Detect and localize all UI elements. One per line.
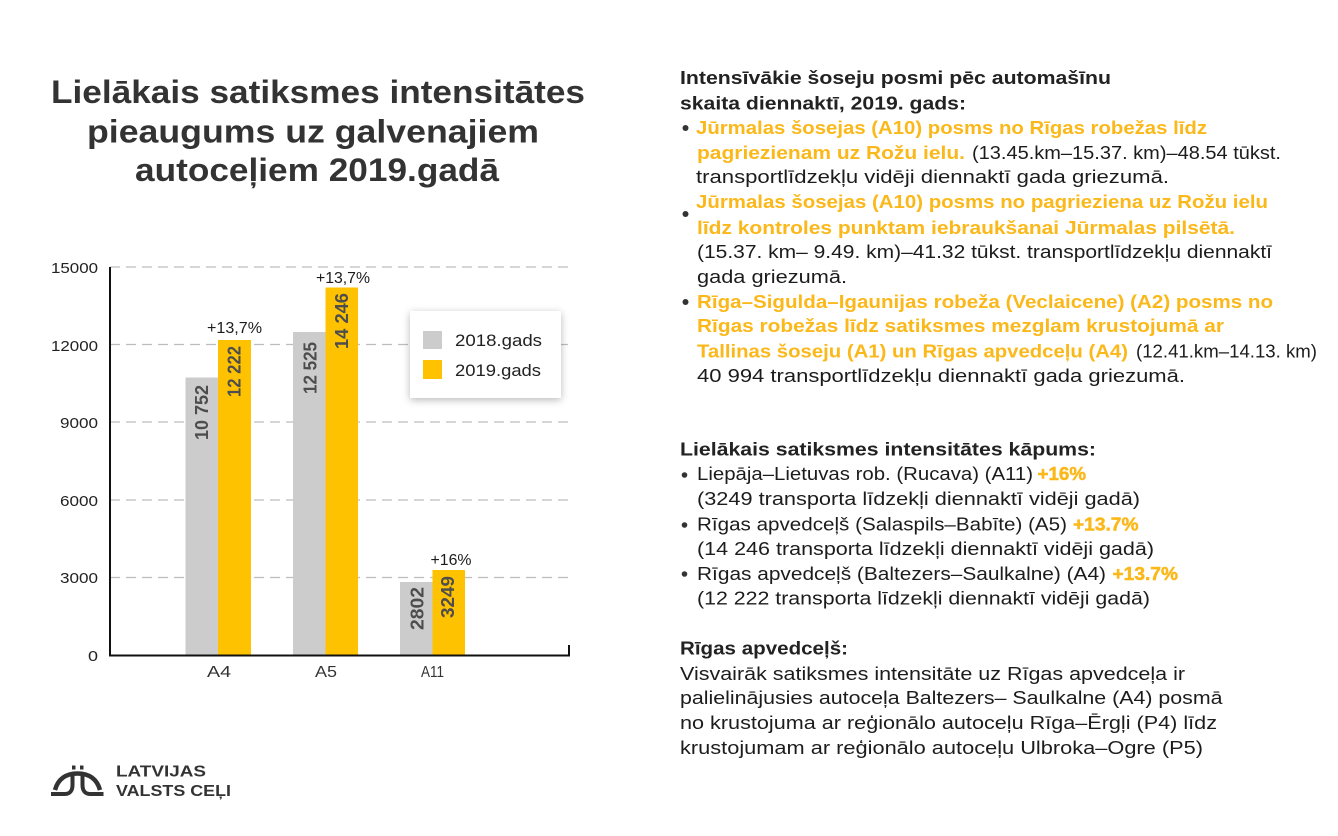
legend: 2018.gads [455,331,542,350]
list item A11: Liepāja–Lietuvas rob. (Rucava) (A11) [697,464,1033,484]
x axis labels [207,664,444,681]
list item 2: (15.37. km– 9.49. km)–41.32 tūkst. transportlīdzekļu diennaktī [697,242,1272,262]
panel: Riga ring road [680,638,1224,758]
list item 3: 40 994 transportlīdzekļu diennaktī gada griezumā. [697,366,1185,386]
bars A5 [293,270,370,655]
list item A11: +16% [1038,464,1086,484]
list item 3: Tallinas šoseju (A1) un Rīgas apvedceļu (A4) [697,342,1128,362]
legend [410,311,561,398]
text block: Visvairāk satiksmes intensitāte uz Rīgas apvedceļa ir [680,664,1185,684]
heading: Intensīvākie šoseju posmi pēc automašīnu [680,68,1111,88]
list item 3 [682,292,1317,386]
list item A4: +13.7% [1112,564,1178,584]
list item A5: Rīgas apvedceļš (Salaspils–Babīte) (A5) [697,514,1067,534]
list item 3: Rīgas robežas līdz satiksmes mezglam krustojumā ar [697,316,1224,336]
list item 1 [682,118,1281,187]
y axis labels [51,260,98,665]
title [51,74,585,188]
bar chart [51,260,569,681]
list item 2: gada griezumā. [697,267,847,287]
y axis labels: 9000 [60,415,98,432]
bars A11: +16% [430,552,472,569]
list item A5: +13.7% [1073,514,1138,534]
heading: Rīgas apvedceļš: [680,638,848,658]
list item A4: Rīgas apvedceļš (Baltezers–Saulkalne) (A4) [697,564,1106,584]
panel: busiest road sections [680,68,1317,386]
bars A5: 14 246 [332,293,352,349]
list item A11 [682,464,1140,509]
text block: palielinājusies autoceļa Baltezers– Saulkalne (A4) posmā [680,688,1224,708]
text block: no krustojuma ar reģionālo autoceļu Rīga–Ērgļi (P4) līdz [680,713,1217,733]
list item A5: (14 246 transporta līdzekļi diennaktī vidēji gadā) [697,539,1154,559]
panel: largest traffic increase [680,440,1178,608]
heading: Lielākais satiksmes intensitātes kāpums: [680,440,1096,460]
bars A5: 12 525 [300,342,320,394]
bars A5: +13,7% [316,270,370,287]
x axis labels: A5 [315,664,337,681]
bars A4: 12 222 [224,346,244,397]
list item A5 [682,514,1154,559]
title: autoceļiem 2019.gadā [135,152,499,188]
text block: krustojumam ar reģionālo autoceļu Ulbroka–Ogre (P5) [680,738,1203,758]
bars A11 [400,552,472,655]
bars A4: +13,7% [207,320,262,337]
y axis labels: 3000 [60,570,98,587]
logo: Latvijas Valsts Ceļi: VALSTS CEĻI [116,783,231,800]
list item 1: (13.45.km–15.37. km)–48.54 tūkst. [972,143,1281,163]
title: Lielākais satiksmes intensitātes [51,74,585,110]
list item 2: Jūrmalas šosejas (A10) posms no pagrieziena uz Rožu ielu [696,192,1268,212]
bars A11: 2802 [408,587,428,630]
y axis labels: 0 [88,648,98,665]
chart axes [110,267,569,656]
legend: 2019.gads [455,361,541,380]
icon: bridge [51,766,104,794]
title: pieaugums uz galvenajiem [87,114,539,150]
list item 3: Rīga–Sigulda–Igaunijas robeža (Veclaicene) (A2) posms no [697,292,1273,312]
y axis labels: 15000 [51,260,98,277]
list item 3: (12.41.km–14.13. km) [1136,342,1317,362]
list item 2 [682,192,1272,287]
list item A11: (3249 transporta līdzekļi diennaktī vidēji gadā) [697,489,1140,509]
y axis labels: 12000 [51,338,98,355]
logo: Latvijas Valsts Ceļi: LATVIJAS [116,764,206,780]
list item A4: (12 222 transporta līdzekļi diennaktī vidēji gadā) [697,588,1150,608]
list item 1: Jūrmalas šosejas (A10) posms no Rīgas robežas līdz [696,118,1207,138]
logo: Latvijas Valsts Ceļi [51,764,231,800]
list item A4 [682,564,1178,608]
y axis labels: 6000 [60,493,98,510]
bars A4 [186,320,262,655]
list item 1: transportlīdzekļu vidēji diennaktī gada griezumā. [696,167,1169,187]
heading [680,68,1111,114]
bars A4: 10 752 [192,385,212,440]
list item 1: pagriezienam uz Rožu ielu. [697,143,965,163]
x axis labels: A4 [207,664,231,681]
heading: skaita diennaktī, 2019. gads: [680,94,966,114]
bars A11: 3249 [438,576,458,618]
list item 2: līdz kontroles punktam iebraukšanai Jūrmalas pilsētā. [697,218,1235,238]
text block [680,664,1224,758]
x axis labels: A11 [421,664,444,681]
